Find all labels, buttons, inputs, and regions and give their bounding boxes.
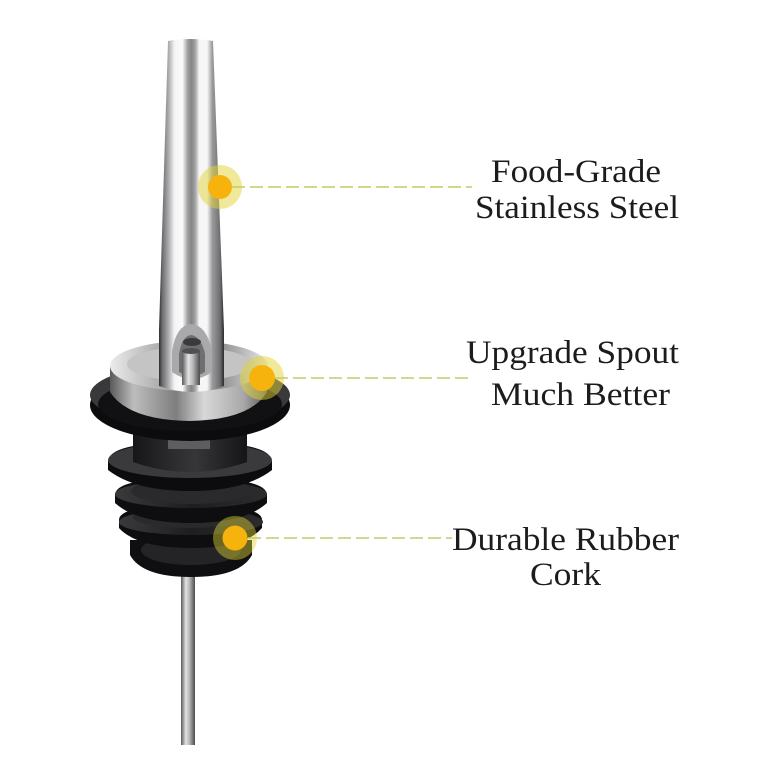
- spout cut-out: [172, 324, 212, 385]
- label: food-grade stainless steel: Stainless Steel: [475, 190, 679, 226]
- pourer spout illustration: [90, 39, 290, 745]
- callout: spout marker and line: [240, 356, 472, 400]
- label: food-grade stainless steel: Food-Grade: [491, 154, 661, 190]
- rubber ring 2: [115, 478, 267, 523]
- rubber ring 1: [108, 442, 272, 491]
- metal pin: [181, 570, 195, 745]
- label: durable rubber cork: Cork: [530, 557, 602, 593]
- black flange: [90, 364, 290, 441]
- label: upgrade spout much better: Much Better: [491, 377, 670, 413]
- label: upgrade spout much better: Upgrade Spout: [466, 335, 679, 371]
- rubber neck: [133, 425, 247, 472]
- label: durable rubber cork: Durable Rubber: [452, 522, 679, 558]
- callout: stainless steel marker and line: [198, 165, 472, 209]
- tapered steel tube: [159, 39, 224, 392]
- callout: cork marker and line: [213, 516, 452, 560]
- rubber ring 4: [130, 535, 252, 577]
- steel collar: [110, 341, 268, 421]
- rubber ring 3: [119, 505, 263, 548]
